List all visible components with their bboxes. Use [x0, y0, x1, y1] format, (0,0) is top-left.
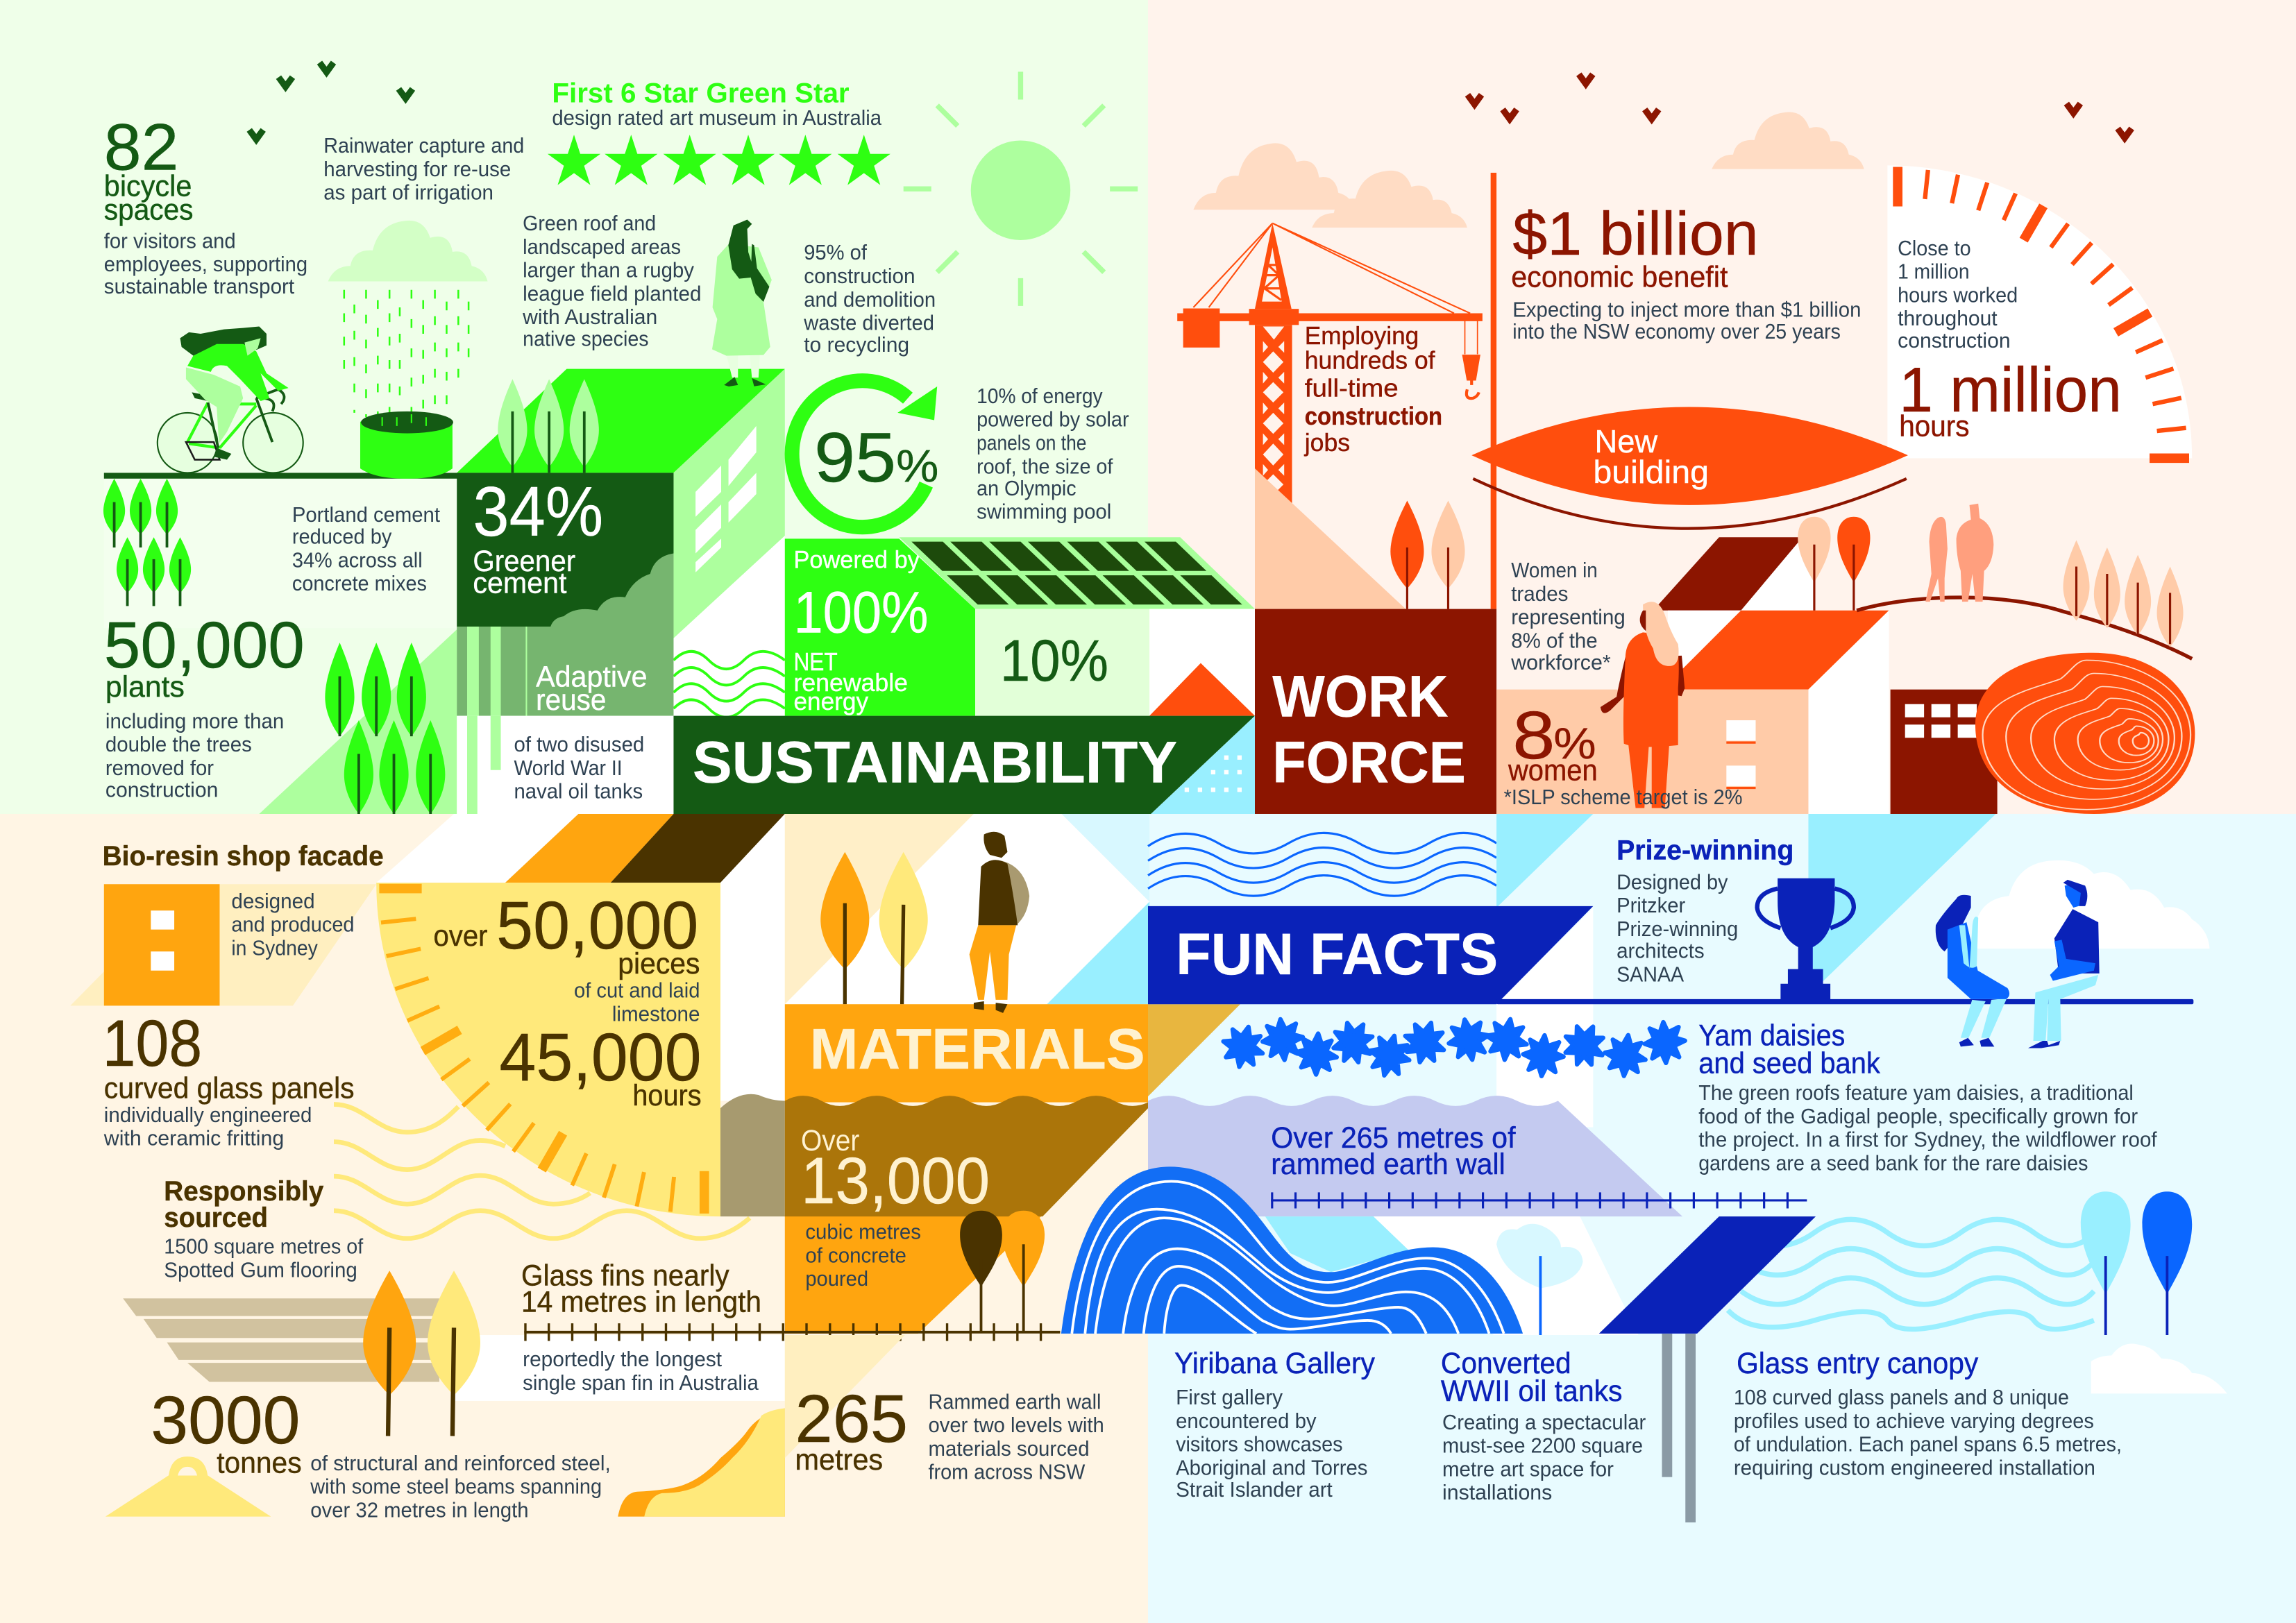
panel: 10% [975, 609, 1149, 716]
panel: powered by 100%: NET [793, 648, 838, 676]
shape: light green slope with trees [259, 629, 457, 814]
text: women in trades: workforce* [1510, 651, 1611, 674]
panel: solar roof [899, 537, 1255, 609]
stat: $1 billion: into the NSW economy over 25 years [1512, 320, 1841, 343]
text: longest single span fin [523, 1348, 759, 1395]
recycling ring 95%: 95 [814, 418, 896, 497]
banner: SUSTAINABILITY: SUSTAINABILITY [693, 730, 1177, 795]
text: women in trades: representing [1511, 606, 1626, 629]
shapes: wedges behind hills [1265, 1216, 1639, 1335]
text: employing construction jobs [1304, 322, 1442, 457]
trees: by house [1798, 517, 1870, 611]
panel: powered by 100% [785, 538, 975, 716]
text: glass fins [521, 1259, 761, 1318]
icon: sun [904, 71, 1138, 306]
shape: new building lens [1471, 407, 1908, 505]
text: women in trades: Women in [1511, 559, 1598, 582]
banner: MATERIALS: 13,000 [801, 1144, 990, 1218]
trees: dark and orange [960, 1211, 1045, 1332]
text: Glass entry canopy: 108 curved glass panels and 8 unique [1734, 1386, 2069, 1409]
text: Yiribana Gallery: encountered by [1176, 1409, 1317, 1433]
panel: bio-resin facade [70, 884, 376, 1005]
banner: MATERIALS: MATERIALS [810, 1018, 1145, 1081]
trees: planted rows left [103, 479, 191, 606]
text: Portland cement: concrete mixes [292, 572, 427, 595]
line: blue bench [1496, 999, 2193, 1004]
stat: 82 bicycle spaces [104, 111, 307, 298]
icon: rain cloud [328, 221, 488, 425]
text: Converted WWII oil tanks: Converted [1441, 1347, 1571, 1379]
text: employing construction jobs: Employing [1305, 322, 1419, 350]
curve under lens [1473, 479, 1907, 529]
text: 95% waste [803, 241, 936, 357]
stat: 3000 tonnes: over 32 metres in length [310, 1498, 529, 1522]
ruler: glass fin length [524, 1332, 1063, 1333]
gauge: limestone quarter circle: of cut and laid [574, 979, 700, 1003]
trees: by workforce block [1390, 501, 1465, 609]
heading: Bio-resin shop facade: Bio-resin shop facade [103, 841, 384, 872]
text: prize-winning [1617, 835, 1793, 986]
text: yam daisies and seed bank: food of the Gadigal people, specifically grown for [1698, 1105, 2138, 1128]
panel: rammed earth wall [1148, 1096, 1682, 1216]
birds: workforce sky [1465, 72, 2134, 144]
banner: WORK FORCE: FORCE [1272, 730, 1466, 795]
banner: WORK FORCE: WORK [1272, 664, 1449, 729]
icon: man with backpack [970, 832, 1029, 1013]
icon: woman on roof [712, 219, 772, 386]
stat: 265 metres: metres [795, 1443, 883, 1476]
text: two oil tanks: naval oil tanks [514, 780, 643, 804]
text: responsibly sourced: Spotted Gum flooring [164, 1258, 357, 1282]
panel: 34% greener cement [457, 473, 673, 627]
recycling ring 95%: % [896, 441, 938, 491]
stat: $1 billion: economic benefit [1511, 260, 1728, 293]
trees: blue [2081, 1191, 2192, 1335]
ruler: rammed earth [1271, 1200, 1810, 1201]
text: cubic metres of concrete: of concrete [805, 1243, 906, 1267]
stat: 265 metres: Rammed earth wall [929, 1390, 1101, 1413]
panel: bio-resin facade: designed [231, 890, 315, 913]
stat: 82 bicycle spaces: 82 [104, 111, 178, 185]
shape: peach slope [1255, 468, 1406, 609]
text: cubic metres of concrete: poured [805, 1267, 868, 1291]
text: longest single span fin: reportedly the longest [523, 1348, 723, 1371]
stat: 3000 tonnes: of structural and reinforced steel, [310, 1452, 611, 1475]
text: Glass entry canopy: profiles used to achieve varying degrees [1734, 1409, 2094, 1433]
text: Converted WWII oil tanks: Creating a spectacular [1442, 1411, 1646, 1434]
text: 95% waste: and demolition [804, 288, 936, 312]
gauge: limestone quarter circle [376, 883, 720, 1216]
stat: 108 curved glass panels: curved glass panels [104, 1071, 355, 1104]
shape: top wedges above limestone [376, 814, 785, 1101]
gauge: 1 million hours [1887, 165, 2192, 458]
panel: 34% greener cement: 34% [473, 473, 603, 551]
text: green roof description: Green roof and [523, 212, 656, 235]
stat: 50,000 plants: construction [105, 779, 218, 802]
text: prize-winning: Prize-winning [1617, 917, 1738, 941]
panel: adaptive reuse [457, 553, 673, 814]
panel: white with orange triangle [1149, 609, 1255, 716]
panel: powered by 100%: 100% [793, 579, 929, 645]
gauge: limestone quarter circle: pieces [618, 947, 700, 980]
text: rainwater capture: Rainwater capture and [323, 134, 524, 158]
text: Glass entry canopy: Glass entry canopy [1737, 1347, 1979, 1379]
panel: building side with windows [673, 369, 785, 716]
text: 95% waste: 95% of [804, 241, 867, 264]
stat: 8% women: 8 [1512, 697, 1555, 773]
text: employing construction jobs: full-time [1305, 375, 1399, 402]
trees: roof [498, 379, 599, 473]
text: Yiribana Gallery: First gallery [1176, 1386, 1283, 1409]
panel: powered by 100%: energy [793, 688, 868, 715]
icon: glass canopy and posts [1599, 1216, 1816, 1522]
text: Portland cement: reduced by [292, 525, 392, 549]
text: green roof description: league field planted [523, 282, 702, 305]
icon: cloud behind people [1975, 860, 2210, 949]
text: yam daisies and seed bank: and seed bank [1698, 1046, 1881, 1079]
gauge: 1 million hours: 1 million [1899, 355, 2122, 425]
hill line [1857, 597, 2192, 658]
text: Portland cement [292, 503, 440, 595]
house [1496, 537, 1889, 814]
text: green roof description: landscaped areas [523, 235, 681, 259]
icon: white cloud [2091, 1344, 2227, 1393]
icon: timber log rings [1975, 653, 2195, 814]
text: 95% waste: waste diverted [803, 312, 934, 335]
icon: seated man [2028, 880, 2100, 1048]
icon: woman in orange [1601, 602, 1682, 808]
panel: 10%: 10% [1000, 628, 1108, 693]
stat: 50,000 plants: plants [105, 670, 185, 703]
text: Yiribana Gallery: Yiribana Gallery [1174, 1347, 1376, 1379]
text: Converted WWII oil tanks: must-see 2200 square [1442, 1434, 1643, 1458]
icon: cyclist [158, 326, 303, 473]
footnote: ISLP: *ISLP scheme target is 2% [1504, 785, 1743, 809]
gauge: 1 million hours: throughout [1898, 307, 1998, 330]
panel: bio-resin facade: and produced [231, 913, 355, 937]
banner: FUN FACTS: FUN FACTS [1176, 921, 1498, 987]
text: employing construction jobs: jobs [1304, 429, 1350, 457]
waves: light blue [1728, 1219, 2094, 1329]
text: prize-winning: Prize-winning [1617, 835, 1793, 865]
stat: 50,000 plants: double the trees [105, 733, 252, 756]
text: solar energy: swimming pool [977, 500, 1111, 524]
stat: 82 bicycle spaces: spaces [104, 193, 193, 226]
heading: First 6 Star Green Star: design rated art museum in Australia [552, 106, 881, 130]
text: employing construction jobs: construction [1305, 402, 1442, 430]
text: Yiribana Gallery: Strait Islander art [1176, 1478, 1333, 1502]
stat: 3000 tonnes: tonnes [217, 1446, 302, 1479]
gauge: 1 million hours: construction [1898, 329, 2011, 352]
icon: weight [105, 1456, 271, 1517]
text: Converted WWII oil tanks [1441, 1347, 1646, 1504]
text: Converted WWII oil tanks: WWII oil tanks [1441, 1375, 1623, 1407]
text: Portland cement: Portland cement [292, 503, 440, 527]
stat: 265 metres [795, 1381, 1104, 1484]
text: green roof description: larger than a rugby [523, 259, 695, 282]
text: two oil tanks [514, 733, 644, 804]
text: green roof description [522, 212, 702, 351]
panel: white concrete note [104, 479, 457, 628]
shape: timber floor stripes [123, 1298, 439, 1382]
text: prize-winning: architects [1617, 940, 1705, 963]
stat: 50,000 plants [104, 609, 305, 802]
text: responsibly sourced: Responsibly [164, 1176, 324, 1207]
panel: powered by 100%: renewable [793, 669, 908, 697]
text: yam daisies and seed bank: Yam daisies [1698, 1019, 1845, 1051]
stat: $1 billion [1511, 199, 1861, 343]
text: Yiribana Gallery: visitors showcases [1176, 1433, 1343, 1456]
shapes: panel above materials [785, 814, 1149, 1004]
text: Yiribana Gallery [1174, 1347, 1376, 1502]
background block right of mast base [1292, 439, 1333, 508]
shape: pale yellow under materials [785, 1335, 905, 1458]
text: yam daisies and seed bank: The green roofs feature yam daisies, a traditional [1698, 1081, 2134, 1105]
stat: 108 curved glass panels [103, 1007, 355, 1150]
gauge: limestone quarter circle: hours [632, 1079, 702, 1112]
panel: rammed earth wall: rammed earth wall [1271, 1148, 1505, 1180]
text: green roof description: native species [523, 328, 649, 351]
waves: green [673, 652, 785, 717]
text: women in trades: trades [1511, 582, 1568, 606]
stat: 8% women: % [1553, 720, 1596, 768]
panel: 34% greener cement: Greener [473, 545, 575, 577]
stat: 50,000 plants: including more than [105, 709, 284, 733]
ground line [104, 473, 458, 479]
gauge: 1 million hours: Close to [1898, 237, 1971, 260]
text: Glass entry canopy: of undulation. Each panel spans 6.5 metres, [1734, 1433, 2122, 1456]
icon: hills orange and yellow [618, 1409, 785, 1517]
stat: 265 metres: 265 [795, 1381, 908, 1456]
orange vertical line [1491, 173, 1496, 609]
stat: 3000 tonnes: with some steel beams spanning [310, 1475, 602, 1499]
recycling ring 95% [792, 381, 938, 527]
text: solar energy [977, 384, 1129, 524]
text: prize-winning: Designed by [1617, 870, 1728, 894]
text: solar energy: panels on the [977, 432, 1086, 455]
stat: 108 curved glass panels: 108 [103, 1007, 202, 1080]
gauge: 1 million hours: hours [1899, 410, 1970, 443]
icon: couple on hill [1925, 504, 1993, 602]
text: women in trades: 8% of the [1511, 629, 1598, 652]
icon: crane [1177, 223, 1483, 508]
birds: sustainability sky [246, 61, 415, 145]
text: Yiribana Gallery: Aboriginal and Torres [1176, 1456, 1367, 1479]
text: glass fins: Glass fins nearly [521, 1259, 729, 1291]
heading: First 6 Star Green Star [552, 78, 881, 130]
text: Glass entry canopy [1734, 1347, 2122, 1479]
stat: $1 billion: $1 billion [1512, 199, 1759, 268]
panel: materials orange lower [785, 1215, 1043, 1334]
icon: six stars [548, 135, 890, 185]
gauge: 1 million hours: hours worked [1898, 283, 2018, 307]
panel: adaptive reuse: Adaptive [536, 660, 647, 692]
text: prize-winning: SANAA [1617, 962, 1685, 986]
stat: 3000 tonnes: 3000 [151, 1382, 300, 1458]
icon: seated woman [1936, 895, 2009, 1046]
text: solar energy: powered by solar [977, 408, 1129, 432]
panel: bio-resin facade: in Sydney [231, 936, 318, 960]
text: 95% waste: to recycling [804, 333, 909, 357]
gauge: 1 million hours: 1 million [1898, 260, 1970, 284]
stat: 82 bicycle spaces: employees, supporting [104, 253, 307, 276]
text: 95% waste: construction [804, 264, 915, 288]
stat: 8% women [1508, 697, 1598, 786]
text: women in trades [1510, 559, 1626, 674]
panel: rammed earth wall: Over 265 metres of [1271, 1121, 1516, 1154]
stat: 265 metres: materials sourced [929, 1437, 1090, 1461]
text: solar energy: 10% of energy [977, 384, 1103, 408]
text: cubic metres of concrete: cubic metres [805, 1221, 921, 1244]
waves: yellow [334, 1105, 750, 1239]
text: yam daisies and seed bank: the project. In a first for Sydney, the wildflower roof [1698, 1128, 2157, 1152]
icon: pale cloud tree [1496, 1224, 1583, 1335]
banner: SUSTAINABILITY [673, 716, 1255, 814]
text: employing construction jobs: hundreds of [1305, 347, 1436, 375]
text: solar energy: an Olympic [977, 477, 1077, 500]
shapes: light blue wedges [1496, 814, 1996, 1127]
waves: blue top [1148, 833, 1496, 896]
trees: orange and yellow [363, 1271, 480, 1436]
text: Portland cement: 34% across all [292, 548, 423, 572]
banner: FUN FACTS [1148, 906, 1593, 1004]
stat: 108 curved glass panels: with ceramic fritting [103, 1127, 284, 1150]
text: rainwater capture: as part of irrigation [323, 181, 493, 205]
text: two oil tanks: of two disused [514, 733, 644, 756]
gauge: limestone quarter circle: limestone [612, 1002, 700, 1026]
text: yam daisies and seed bank [1698, 1019, 2157, 1175]
trees: above materials [820, 852, 928, 1004]
icon: yam daisies [1218, 1010, 1694, 1085]
panel: 34% greener cement: cement [473, 566, 567, 599]
shape: new building lens: New [1594, 423, 1658, 459]
text: Converted WWII oil tanks: installations [1442, 1481, 1552, 1504]
stat: 82 bicycle spaces: sustainable transport [104, 275, 295, 298]
heading: First 6 Star Green Star: First 6 Star Green Star [552, 78, 850, 109]
text: responsibly sourced: 1500 square metres of [164, 1235, 364, 1259]
gauge: limestone quarter circle: over [433, 919, 488, 952]
text: solar energy: roof, the size of [977, 454, 1113, 478]
green roof [457, 369, 785, 473]
shape: new building lens: building [1593, 454, 1709, 490]
panel: powered by 100%: Powered by [793, 547, 920, 574]
banner: WORK FORCE [1255, 609, 1496, 814]
banner: MATERIALS [720, 1004, 1240, 1218]
stat: 82 bicycle spaces: bicycle [104, 170, 192, 203]
stat: $1 billion: Expecting to inject more than $1 billion [1512, 298, 1861, 322]
stat: 50,000 plants: 50,000 [104, 609, 305, 682]
panel: white glass fin strip [454, 1335, 785, 1401]
text: yam daisies and seed bank: gardens are a seed bank for the rare daisies [1698, 1151, 2088, 1175]
stat: 82 bicycle spaces: for visitors and [104, 229, 236, 253]
text: responsibly sourced: sourced [164, 1203, 268, 1233]
text: Glass entry canopy: requiring custom engineered installation [1734, 1456, 2095, 1479]
text: glass fins: 14 metres in length [521, 1285, 761, 1318]
gauge: limestone quarter circle: 45,000 [499, 1019, 702, 1095]
stat: 3000 tonnes [151, 1382, 611, 1522]
stat: 50,000 plants: removed for [105, 756, 214, 780]
text: prize-winning: Pritzker [1617, 894, 1685, 917]
banner: MATERIALS: Over [801, 1124, 859, 1157]
text: Converted WWII oil tanks: metre art space for [1442, 1457, 1614, 1481]
text: rainwater capture: harvesting for re-use [323, 158, 511, 181]
stat: 8% women: women [1508, 754, 1598, 786]
stat: 265 metres: from across NSW [929, 1461, 1085, 1484]
text: responsibly sourced [164, 1176, 364, 1282]
text: cubic metres of concrete [805, 1221, 921, 1291]
stat: 108 curved glass panels: individually engineered [104, 1103, 312, 1127]
text: two oil tanks: World War II [514, 756, 623, 780]
stat: 265 metres: over two levels with [929, 1413, 1104, 1437]
text: green roof description: with Australian [522, 305, 657, 329]
text: longest single span fin: single span fin in Australia [523, 1371, 759, 1395]
icon: water tank [360, 411, 453, 479]
panel: dark building [1891, 690, 1998, 814]
icon: blue wave hills [1061, 1166, 1523, 1334]
text: rainwater capture [323, 134, 524, 205]
panel: adaptive reuse: reuse [536, 683, 606, 716]
clouds: peach [1193, 112, 1864, 228]
gauge: limestone quarter circle: 50,000 [496, 887, 698, 963]
trees: on hill [2063, 540, 2184, 647]
icon: trophy [1757, 878, 1854, 1001]
